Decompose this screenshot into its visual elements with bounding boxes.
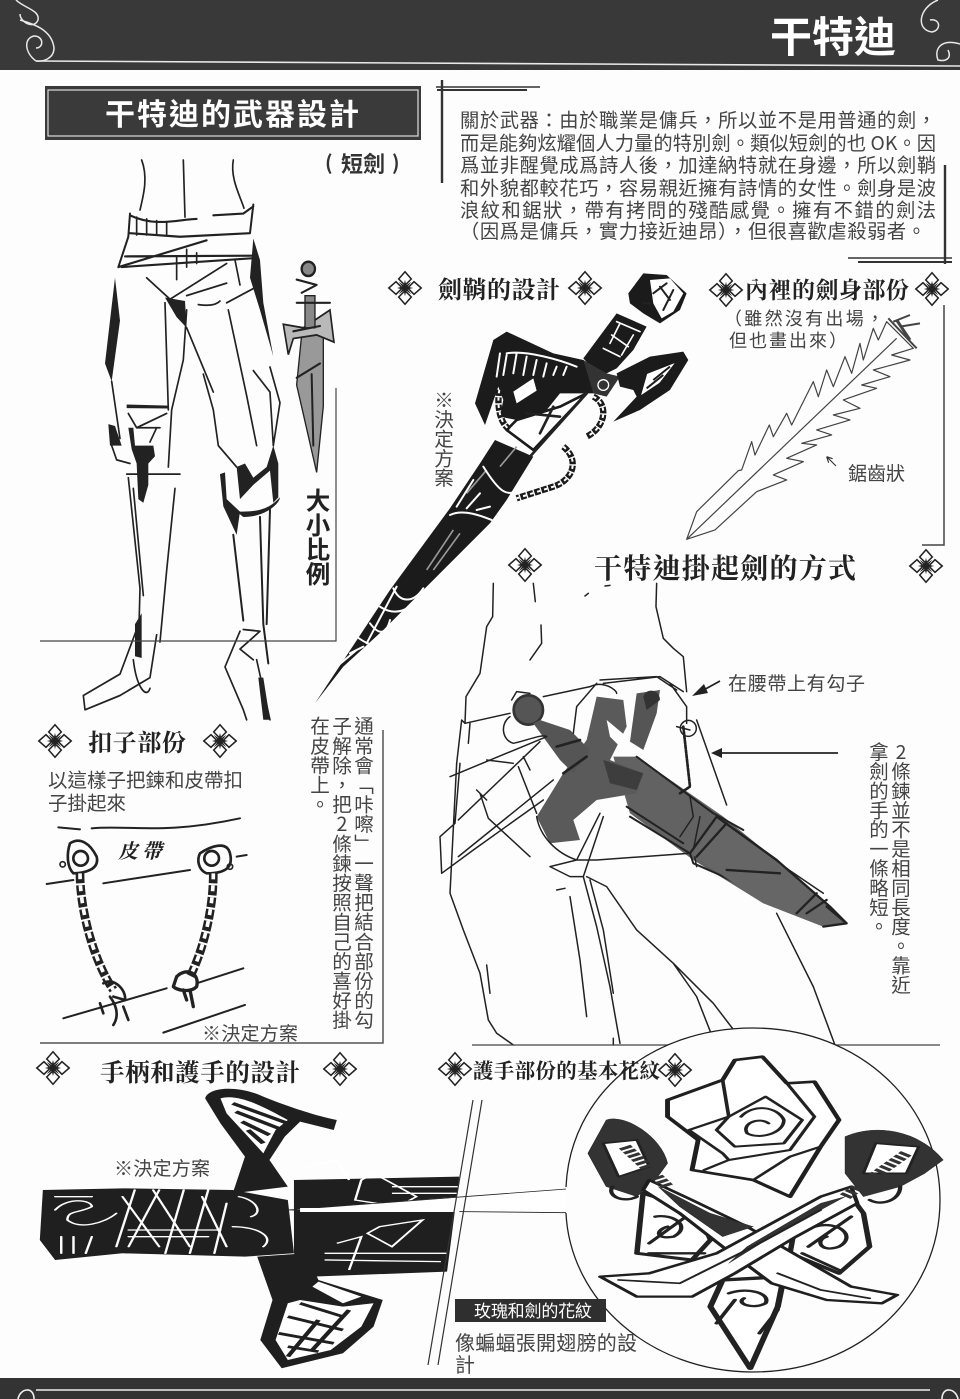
serrated blade drawing: [687, 315, 920, 539]
description text: 而是能夠炫耀個人力量的特別劍。類似短劍的也 OK。因: [460, 128, 936, 156]
note: how to hang chain: [48, 764, 243, 816]
heading: inner blade: 內裡的劍身部份: [745, 278, 909, 303]
header band: [0, 0, 960, 70]
size comparison small sword: [283, 262, 334, 472]
rose and crossed swords emblem: [588, 1057, 943, 1368]
heading: how to hang sword: [509, 549, 942, 585]
note: chains length vertical: 2條鍊並不是相同長度。靠近: [886, 742, 916, 994]
arrow: to hook: [692, 681, 720, 696]
caption box: rose and sword pattern: 玫瑰和劍的花紋: [474, 1297, 592, 1322]
header title: 干特迪: [770, 4, 896, 65]
heading: scabbard design: [389, 272, 601, 304]
note: chains length vertical: [864, 741, 916, 994]
hip figure with hanging sword: [440, 583, 847, 1045]
title box: [45, 86, 421, 140]
hilt and guard drawing: [40, 1089, 566, 1368]
subtitle: short sword: 短劍: [341, 147, 385, 179]
note: never appeared: （雖然沒有出場，: [724, 305, 884, 331]
heading: grip and guard: [37, 1052, 356, 1087]
zoom circle: [566, 1028, 940, 1372]
note: chosen design clasp: ※決定方案: [202, 1019, 298, 1046]
clasp and chain drawing: [47, 818, 247, 1033]
heading: clasp part: [39, 725, 236, 757]
note: clasp vertical: [306, 716, 378, 1030]
heading: guard pattern: [439, 1053, 691, 1086]
note: chosen design hilt: ※決定方案: [114, 1154, 210, 1181]
description text: 關於武器：由於職業是傭兵，所以並不是用普通的劍，: [460, 105, 936, 133]
heading: grip and guard: 手柄和護手的設計: [100, 1059, 300, 1087]
note: bat wing design: 計: [455, 1349, 475, 1378]
leg figure sketch: [83, 160, 280, 720]
description text: [460, 105, 936, 244]
right section divider line: [472, 1044, 940, 1046]
note: clasp vertical: 在皮帶上。: [306, 716, 334, 814]
description text: 和外貌都較花巧，容易親近擁有詩情的女性。劍身是波: [460, 173, 936, 201]
description text: 浪紋和鋸狀，帶有拷問的殘酷感覺。擁有不錯的劍法: [460, 195, 936, 223]
note: how to hang chain: 子掛起來: [48, 787, 126, 816]
label: belt: 皮帶: [118, 841, 165, 863]
arrow: to chain: [711, 748, 838, 758]
description text: 爲並非醒覺成爲詩人後，加達納特就在身邊，所以劍鞘: [460, 150, 936, 178]
heading: guard pattern: 護手部份的基本花紋: [473, 1059, 660, 1083]
note: bat wing design: 像蝙蝠張開翅膀的設: [455, 1327, 637, 1356]
note: chosen design vertical: ※決定方案: [430, 390, 458, 488]
label: serrated: 鋸齒狀: [848, 459, 905, 486]
heading: clasp part: 扣子部份: [88, 730, 186, 757]
clasp section frame line: [40, 730, 383, 1043]
note: chains length vertical: 拿劍的手的一條略短。: [864, 741, 894, 936]
note: hook on belt: 在腰帶上有勾子: [728, 669, 865, 696]
title box: 干特迪的武器設計: [105, 90, 359, 134]
subtitle: short sword: ): [392, 147, 400, 176]
figure frame line: [40, 388, 336, 641]
scabbard dagger drawing: [315, 273, 688, 703]
description bracket lines: [436, 80, 952, 264]
arrow: serration note: [827, 457, 836, 466]
note: how to hang chain: 以這樣子把鍊和皮帶扣: [48, 764, 243, 793]
footer band: [0, 1378, 960, 1399]
note: clasp vertical: 通常會「咔嚓」一聲把結合部份的勾: [350, 716, 378, 1030]
note: never appeared: [724, 305, 884, 353]
note: clasp vertical: 子解除，把2條鍊按照自己的喜好掛: [328, 716, 356, 1030]
heading: how to hang sword: 干特迪掛起劍的方式: [594, 553, 856, 585]
diagonal double divider: [428, 1100, 482, 1365]
heading: inner blade: [710, 273, 948, 306]
label: size comparison: 大小比例: [300, 488, 336, 586]
note: bat wing design: [455, 1327, 637, 1378]
blade section frame line: [922, 305, 944, 545]
subtitle: short sword: [325, 147, 400, 179]
subtitle: short sword: (: [325, 147, 333, 176]
note: never appeared: 但也畫出來）: [729, 327, 847, 353]
description text: （因爲是傭兵，實力接近迪昂），但很喜歡虐殺弱者。: [460, 216, 926, 244]
heading: scabbard design: 劍鞘的設計: [438, 277, 560, 304]
